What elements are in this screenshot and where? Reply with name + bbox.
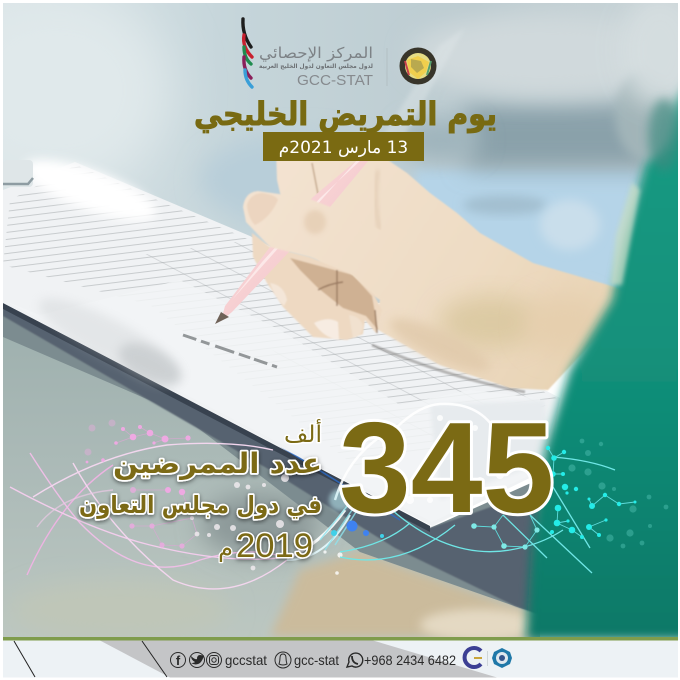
paper form (3, 147, 560, 526)
icon: instagram (206, 652, 222, 668)
statistic: 345 thousand (79, 396, 554, 565)
label: in GCC countries: في دول مجلس التعاون (79, 491, 322, 519)
clip at the clipboard corner (3, 160, 33, 187)
icon: facebook: f (176, 653, 181, 668)
icon: whatsapp (347, 653, 363, 667)
date badge (263, 132, 424, 161)
table surface (3, 320, 540, 641)
hand: thumb (242, 190, 358, 280)
white centre burst and arcs (287, 404, 504, 575)
footer diagonal line right (142, 641, 167, 677)
handle: gcc-stat: gcc-stat (294, 652, 339, 668)
hand: lower fingers (252, 233, 382, 340)
divider (487, 651, 488, 666)
pen (215, 160, 369, 324)
icon: snapchat (275, 652, 291, 668)
divider (386, 48, 388, 86)
footer grey band (100, 640, 497, 678)
clipboard edge (3, 303, 560, 615)
photo background: misty room (0, 0, 678, 303)
header: organisation logos (243, 19, 436, 89)
hand: palm, wrist and back finger (276, 150, 640, 390)
label: year 2019: 2019 (236, 527, 313, 565)
date badge: 13 مارس 2021م (279, 138, 408, 158)
logo wordmark: Arabic tagline: لدول مجلس التعاون لدول الخليج العربية (259, 63, 373, 70)
pink network decoration (10, 420, 289, 589)
logo wordmark: GCC-STAT: GCC-STAT (297, 72, 373, 89)
icon: blue G logo (465, 648, 482, 667)
footer green rule (3, 637, 678, 640)
green scrubs (526, 75, 680, 640)
icon: twitter (190, 652, 204, 668)
label: number of nurses: عدد الممرضين (113, 447, 322, 480)
title: يوم التمريض الخليجي (194, 95, 497, 133)
white mist over the top-right (615, 0, 680, 171)
footer diagonal line left (14, 641, 35, 677)
logo wordmark: Arabic name: المركز الإحصائي (259, 44, 373, 63)
unit: thousand: ألف (284, 419, 322, 448)
footer (3, 637, 678, 678)
handle: gccstat: gccstat (225, 652, 267, 668)
footer background (3, 640, 678, 678)
icon: GCC emblem (400, 48, 436, 84)
icon: round certification badge (492, 648, 512, 668)
label: year suffix: م (218, 534, 233, 562)
cyan network decoration (331, 439, 668, 573)
big number: 345 (339, 396, 554, 540)
icon: GCC-STAT ribbon (243, 19, 252, 87)
hand shading (390, 290, 584, 374)
phone number: +968 2434 6482 (364, 652, 456, 668)
icon: facebook (170, 652, 186, 668)
